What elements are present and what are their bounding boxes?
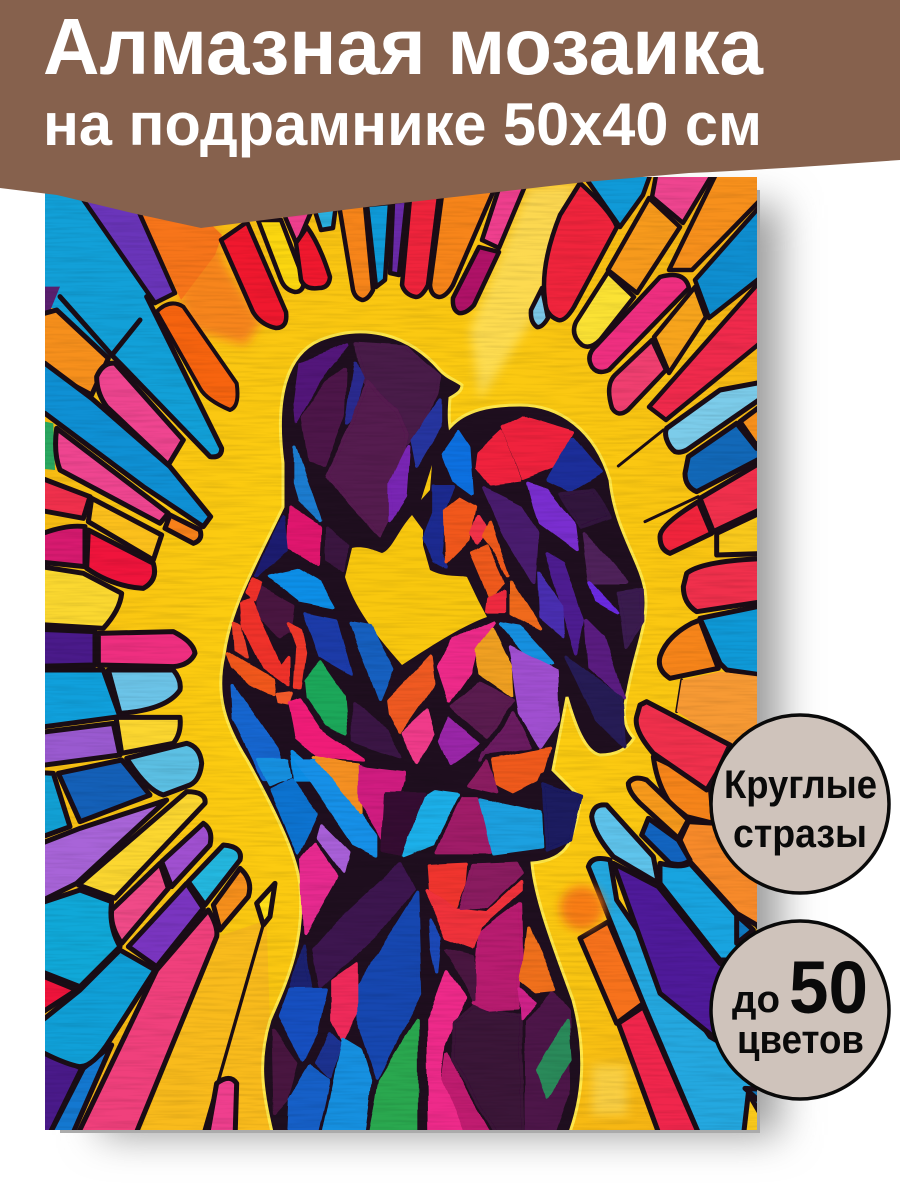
rays: lower right bbox=[580, 757, 773, 1137]
painting: stained glass couple bbox=[20, 170, 773, 1140]
lower body glass pieces bbox=[257, 760, 580, 1135]
rays: top bbox=[141, 170, 770, 420]
badge: round rhinestones: стразы bbox=[733, 812, 867, 856]
badge: round rhinestones: Круглые bbox=[724, 763, 877, 807]
canvas shadow bbox=[60, 190, 780, 1135]
orange wash upper left bbox=[170, 226, 264, 349]
badge: up to 50 colours: цветов bbox=[737, 1018, 864, 1062]
brush texture bbox=[45, 177, 757, 1130]
rays: lower left bbox=[45, 714, 278, 1130]
pale sun band bbox=[470, 183, 577, 400]
header banner bbox=[0, 0, 900, 228]
title line 1: Алмазная мозаика bbox=[43, 2, 763, 91]
heart gap between the faces bbox=[345, 465, 487, 665]
orange glow bbox=[560, 886, 604, 930]
rays: right side bbox=[618, 380, 773, 790]
badge: up to 50 colours bbox=[711, 921, 889, 1099]
badge: up to 50 colours: до bbox=[732, 979, 780, 1021]
badge: up to 50 colours: 50 bbox=[789, 946, 868, 1029]
rays: upper left bbox=[45, 194, 178, 360]
rays: left side bbox=[45, 286, 240, 730]
title line 2: на подрамнике 50х40 см bbox=[43, 91, 762, 158]
badge: round rhinestones bbox=[711, 715, 889, 893]
couple silhouette bbox=[221, 332, 646, 1132]
glass panes of the couple bbox=[228, 343, 642, 1135]
upper body glass pieces bbox=[228, 343, 642, 780]
pale patch lower right bbox=[592, 1065, 627, 1115]
